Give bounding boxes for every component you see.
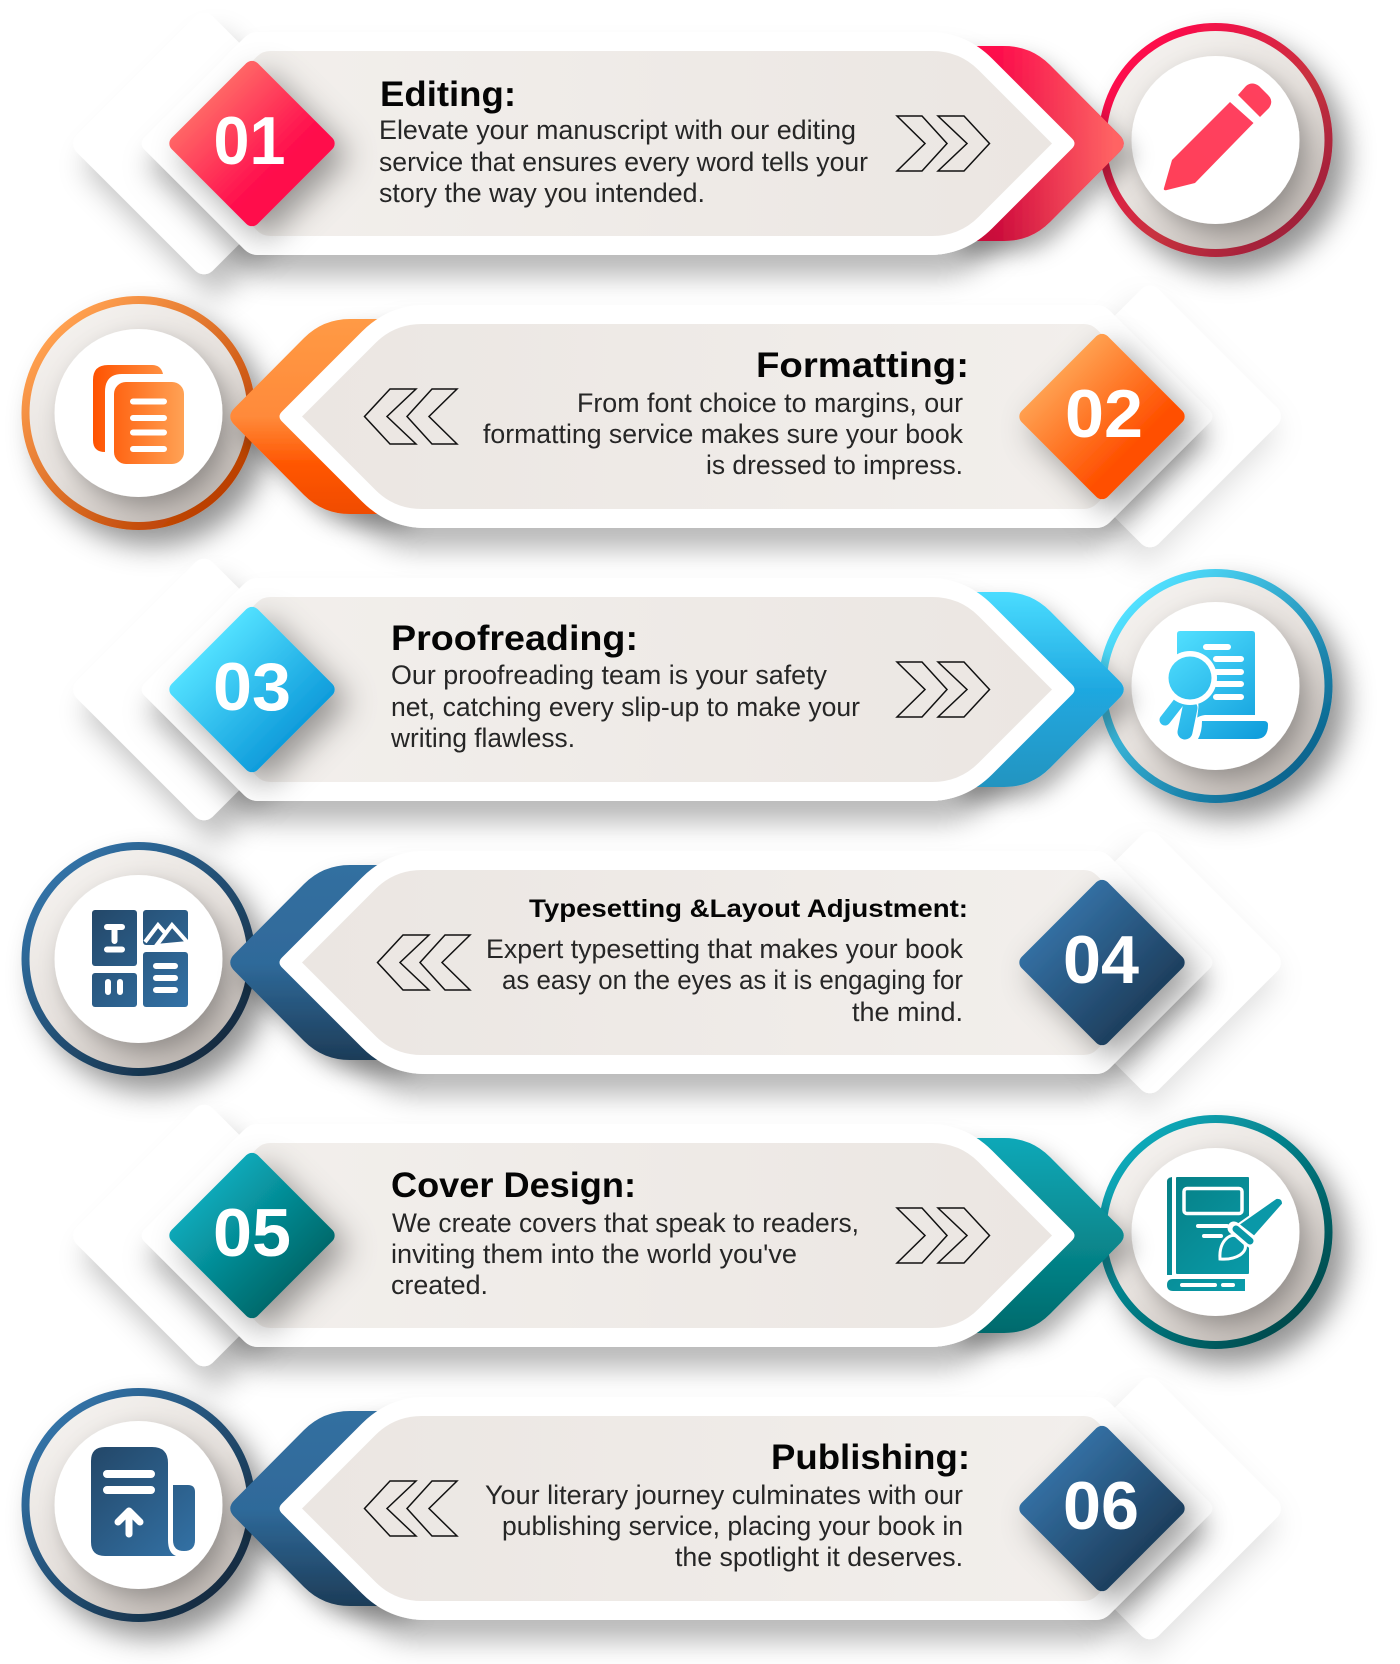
beige band xyxy=(170,51,1052,236)
icon circle ring xyxy=(1098,1115,1332,1349)
icon circle disc xyxy=(30,850,248,1068)
beige band xyxy=(302,1416,1184,1601)
heading: Formatting: xyxy=(756,346,969,385)
colored arrow tab xyxy=(230,865,404,1060)
panel: Publishing step 06 xyxy=(22,1373,1286,1644)
band drop shadow xyxy=(142,32,1074,255)
number diamond xyxy=(166,58,338,229)
icon circle ring xyxy=(22,842,256,1076)
body text: Expert typesetting that makes your book xyxy=(486,934,963,964)
body text: created. xyxy=(391,1270,488,1300)
body text: is dressed to impress. xyxy=(706,450,963,480)
number diamond xyxy=(1016,877,1188,1048)
body text: writing flawless. xyxy=(390,723,575,753)
band drop shadow xyxy=(142,578,1074,801)
icon: layout tiles xyxy=(92,910,188,1007)
white band outline xyxy=(280,1397,1212,1620)
backing white diamond xyxy=(68,1100,340,1371)
heading: Proofreading: xyxy=(391,619,638,658)
chevron arrows xyxy=(897,662,990,717)
colored arrow tab xyxy=(230,319,404,514)
beige band xyxy=(302,870,1184,1055)
number 06: 06 xyxy=(1063,1468,1139,1544)
icon circle ring xyxy=(22,1388,256,1622)
white band outline xyxy=(142,578,1074,801)
colored arrow tab xyxy=(950,46,1124,241)
panel: Formatting step 02 xyxy=(22,281,1286,552)
heading: Editing: xyxy=(380,75,516,114)
number 01: 01 xyxy=(214,103,286,179)
body text: publishing service, placing your book in xyxy=(502,1511,963,1541)
body text: as easy on the eyes as it is engaging for xyxy=(502,965,963,995)
number diamond xyxy=(166,604,338,775)
backing white diamond xyxy=(68,554,340,825)
icon circle ring xyxy=(22,296,256,530)
heading: Cover Design: xyxy=(391,1166,636,1205)
colored arrow tab xyxy=(950,1138,1124,1333)
number diamond xyxy=(166,1150,338,1321)
white band outline xyxy=(280,851,1212,1074)
body text: We create covers that speak to readers, xyxy=(392,1208,859,1238)
panel: Typesetting and Layout step 04 xyxy=(22,827,1286,1098)
colored arrow tab xyxy=(230,1411,404,1606)
body text: formatting service makes sure your book xyxy=(483,419,963,449)
band drop shadow xyxy=(280,305,1212,528)
icon: documents xyxy=(93,365,184,464)
icon: pencil xyxy=(1164,84,1271,190)
chevron arrows xyxy=(897,116,990,171)
backing white diamond xyxy=(1014,1373,1286,1644)
number 05: 05 xyxy=(213,1195,291,1271)
heading: Typesetting &Layout Adjustment: xyxy=(529,895,968,923)
white band outline xyxy=(142,32,1074,255)
icon: publishing document with upload arrow xyxy=(91,1447,195,1556)
body text xyxy=(390,660,860,753)
number diamond xyxy=(1016,331,1188,502)
icon circle disc xyxy=(30,304,248,522)
icon circle disc xyxy=(1106,1123,1324,1341)
body text: Elevate your manuscript with our editing xyxy=(379,115,856,145)
icon circle white centre xyxy=(1132,602,1300,770)
panel: Proofreading step 03 xyxy=(68,554,1333,825)
body text xyxy=(391,1208,859,1300)
white band outline xyxy=(280,305,1212,528)
chevron arrows xyxy=(897,1208,990,1263)
panel: Editing step 01 xyxy=(68,8,1333,279)
beige band xyxy=(170,597,1052,782)
icon circle disc xyxy=(1106,31,1324,249)
icon circle white centre xyxy=(54,329,222,497)
icon circle ring xyxy=(1098,569,1332,803)
beige band xyxy=(170,1143,1052,1328)
icon circle ring xyxy=(1098,23,1332,257)
body text: Our proofreading team is your safety xyxy=(391,660,827,690)
chevron arrows xyxy=(378,935,470,990)
body text: inviting them into the world you've xyxy=(391,1239,797,1269)
body text: story the way you intended. xyxy=(379,178,705,208)
body text xyxy=(485,1480,963,1572)
icon circle white centre xyxy=(1132,56,1300,224)
beige band xyxy=(302,324,1184,509)
chevron arrows xyxy=(364,1481,457,1536)
band drop shadow xyxy=(280,851,1212,1074)
icon circle white centre xyxy=(54,1421,222,1589)
body text: Your literary journey culminates with our xyxy=(485,1480,963,1510)
icon circle white centre xyxy=(54,875,222,1043)
number diamond xyxy=(1016,1423,1188,1594)
backing white diamond xyxy=(68,8,340,279)
body text: the spotlight it deserves. xyxy=(675,1542,963,1572)
colored arrow tab xyxy=(950,592,1124,787)
number 03: 03 xyxy=(213,649,291,725)
body text xyxy=(483,388,963,480)
body text: the mind. xyxy=(852,997,963,1027)
backing white diamond xyxy=(1014,281,1286,552)
heading: Publishing: xyxy=(771,1438,970,1477)
icon circle disc xyxy=(30,1396,248,1614)
icon circle white centre xyxy=(1132,1148,1300,1316)
body text: service that ensures every word tells your xyxy=(379,147,868,177)
icon: book with brush xyxy=(1167,1177,1283,1291)
body text: net, catching every slip-up to make your xyxy=(391,692,860,722)
white band outline xyxy=(142,1124,1074,1347)
number 02: 02 xyxy=(1065,376,1143,452)
band drop shadow xyxy=(280,1397,1212,1620)
icon circle disc xyxy=(1106,577,1324,795)
body text xyxy=(486,934,963,1027)
body text: From font choice to margins, our xyxy=(577,388,963,418)
number 04: 04 xyxy=(1063,922,1139,998)
panel: Cover Design step 05 xyxy=(68,1100,1333,1371)
icon: document with magnifier xyxy=(1163,631,1268,739)
backing white diamond xyxy=(1014,827,1286,1098)
band drop shadow xyxy=(142,1124,1074,1347)
chevron arrows xyxy=(364,389,457,444)
body text xyxy=(379,115,868,208)
